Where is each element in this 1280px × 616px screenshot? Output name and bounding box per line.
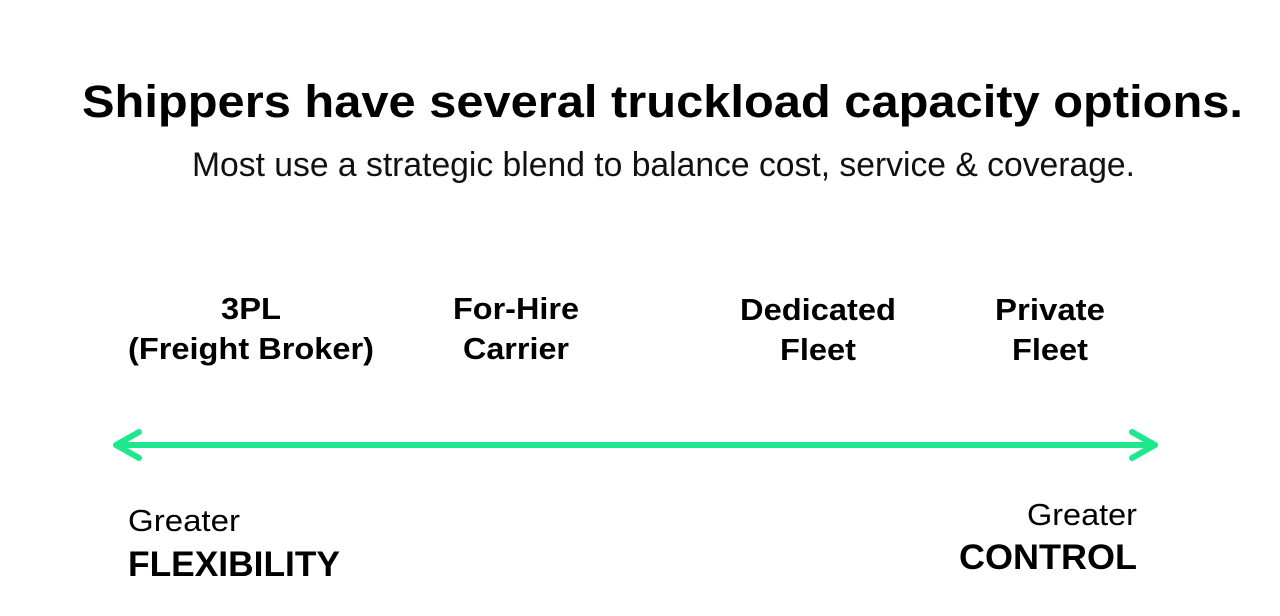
label: greater control: CONTROL (959, 538, 1137, 577)
label: greater control (959, 497, 1137, 577)
option: For-Hire Carrier: Carrier (463, 331, 569, 366)
option: 3PL: (Freight Broker) (128, 331, 374, 366)
label: greater flexibility: Greater (128, 503, 240, 538)
option: For-Hire Carrier: For-Hire (453, 291, 579, 326)
title: Shippers have several truckload capacity options. (82, 76, 1243, 127)
option: For-Hire Carrier (453, 291, 579, 366)
option: Private Fleet (995, 292, 1105, 367)
label: greater flexibility (128, 503, 340, 584)
option: 3PL: 3PL (221, 291, 281, 326)
option: Private Fleet: Private (995, 292, 1105, 327)
arrow: double-headed spectrum (116, 432, 1155, 458)
option: Dedicated Fleet: Dedicated (740, 292, 896, 327)
subtitle: Most use a strategic blend to balance cost, service & coverage. (192, 146, 1135, 184)
option: Dedicated Fleet (740, 292, 896, 367)
option: Private Fleet: Fleet (1012, 332, 1088, 367)
option: 3PL (128, 291, 374, 366)
label: greater flexibility: FLEXIBILITY (128, 545, 340, 584)
label: greater control: Greater (1027, 497, 1137, 532)
option: Dedicated Fleet: Fleet (780, 332, 856, 367)
